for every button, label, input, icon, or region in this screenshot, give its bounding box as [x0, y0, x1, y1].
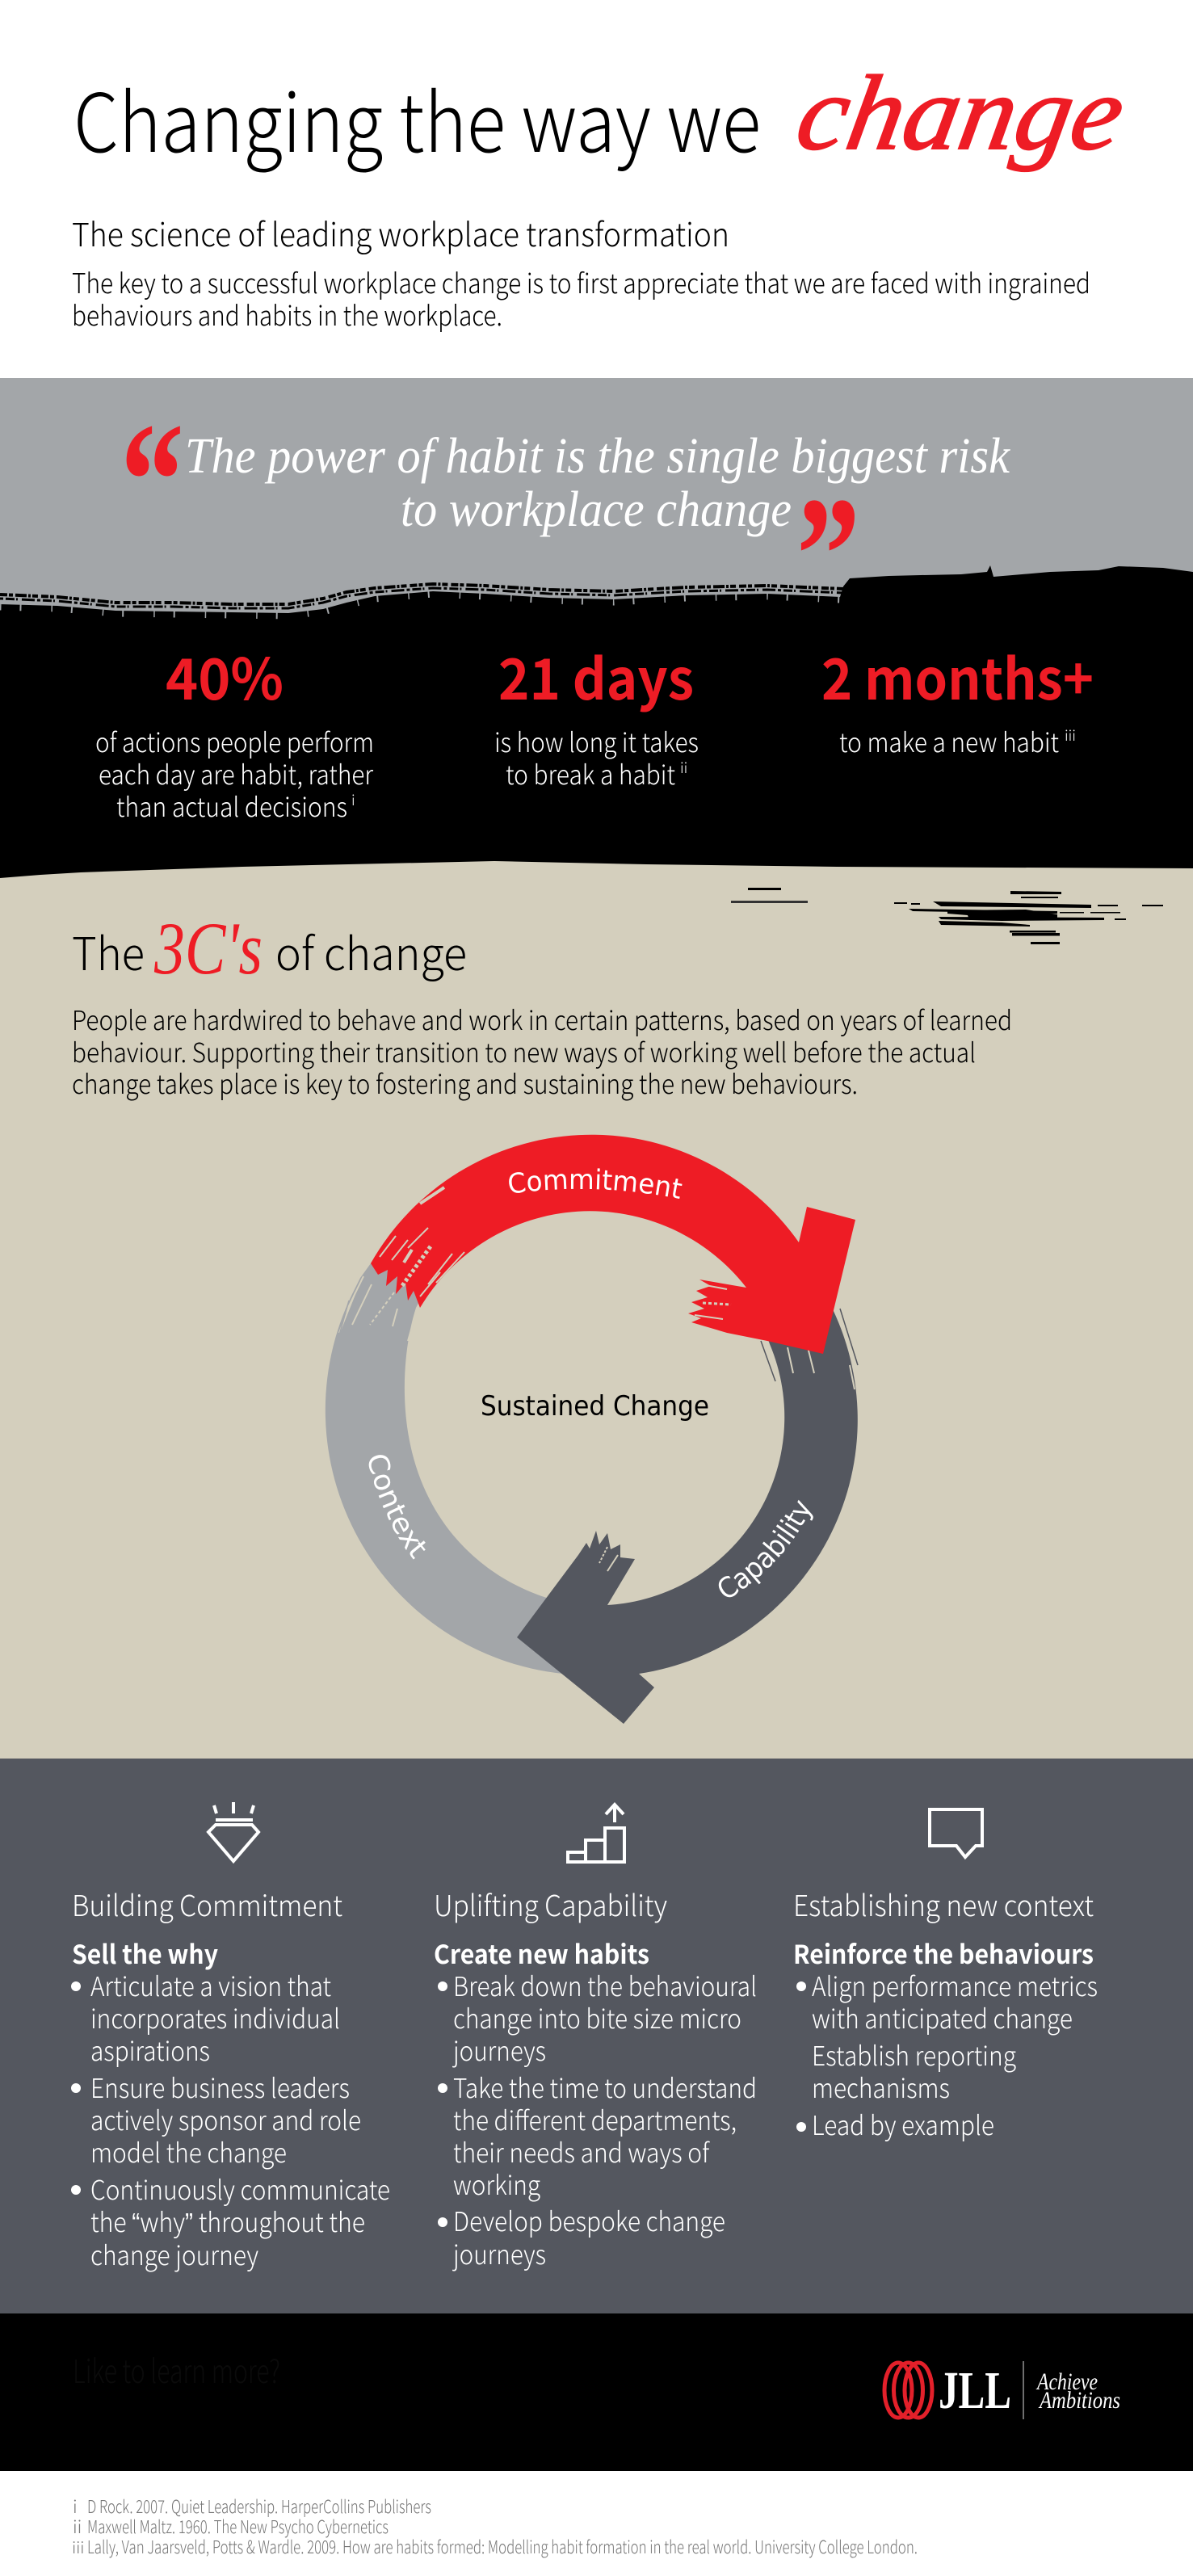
- statistic: 40%: than actual decisions: [116, 786, 347, 825]
- bullet list: Take the time to understand: [453, 2067, 757, 2106]
- statistic: 2 months+: iii: [1065, 725, 1076, 746]
- references: Maxwell Maltz. 1960. The New Psycho Cybernetics: [87, 2513, 389, 2539]
- column: building commitment: [71, 1802, 390, 2273]
- icon: diamond: [208, 1802, 258, 1861]
- faint call to action: Like to learn more?: [73, 2346, 280, 2393]
- panel: 3Cs background: [0, 861, 1193, 1759]
- bullet list: Align performance metrics: [812, 1965, 1098, 2004]
- icon: speech bubble: [930, 1809, 982, 1857]
- bullet list: actively sponsor and role: [90, 2099, 361, 2138]
- bullet list: journeys: [452, 2234, 546, 2272]
- bullet list: with anticipated change: [812, 1998, 1073, 2036]
- closing quote mark: ”: [796, 463, 860, 647]
- references: D Rock. 2007. Quiet Leadership. HarperCollins Publishers: [87, 2493, 431, 2519]
- logo: JLL: [884, 2361, 1120, 2420]
- subtitle: The science of leading workplace transformation: [72, 209, 729, 256]
- logo: JLL: Ambitions: [1038, 2387, 1120, 2414]
- bullet list: Develop bespoke change: [453, 2200, 725, 2239]
- panel: statistics band: [0, 565, 1193, 889]
- logo rings: [884, 2363, 932, 2418]
- heading: Building Commitment: [72, 1883, 342, 1925]
- subheading: Reinforce the behaviours: [793, 1935, 1094, 1972]
- statistic: 40%: i: [351, 789, 355, 810]
- 3Cs heading: of change: [275, 918, 467, 984]
- bullet list: aspirations: [90, 2030, 210, 2069]
- statistic: 40%: 40%: [166, 635, 284, 716]
- column: establishing new context: [793, 1809, 1098, 2143]
- references: ii: [73, 2513, 82, 2539]
- intro text: behaviours and habits in the workplace.: [72, 294, 502, 334]
- panel: actions: [0, 1759, 1193, 2313]
- 3Cs paragraph: behaviour. Supporting their transition to new ways of working well before the actual: [72, 1032, 976, 1070]
- 3Cs heading: [72, 907, 467, 990]
- bullet list: change into bite size micro: [453, 1998, 741, 2036]
- references: Lally, Van Jaarsveld, Potts & Wardle. 2009. How are habits formed: Modelling habit formation in the real world. University College London.: [87, 2533, 918, 2559]
- icon: rising bars: [568, 1805, 624, 1862]
- bullet list: change journey: [90, 2234, 258, 2273]
- bullet list: model the change: [90, 2132, 287, 2170]
- statistic: 2 months+: [821, 635, 1094, 760]
- label: Context: Context: [368, 1455, 426, 1559]
- logo: JLL: Achieve: [1035, 2368, 1098, 2395]
- bullet list: journeys: [452, 2030, 546, 2069]
- bullet list: [796, 1965, 1098, 2143]
- heading: Establishing new context: [793, 1883, 1094, 1925]
- references: [72, 2493, 918, 2559]
- statistic: 21 days: ii: [680, 757, 687, 778]
- cycle diagram: [325, 1134, 859, 1724]
- title: Changing the way we: [74, 58, 761, 175]
- statistic: 21 days: to break a habit: [506, 754, 675, 792]
- arrow: context: [325, 1263, 562, 1674]
- column: uplifting capability: [434, 1805, 757, 2272]
- bullet list: the different departments,: [453, 2099, 737, 2138]
- bullet list: Ensure business leaders: [90, 2067, 350, 2106]
- label: Commitment: Commitment: [509, 1168, 682, 1199]
- panel: footer band: [0, 2313, 1193, 2471]
- arrow: capability: [517, 1309, 859, 1724]
- references: i: [73, 2493, 78, 2519]
- statistic: 40%: each day are habit, rather: [99, 754, 373, 792]
- bullet list: their needs and ways of: [453, 2132, 710, 2170]
- bullet list: Establish reporting: [812, 2035, 1016, 2074]
- statistic: 40%: of actions people perform: [95, 721, 374, 760]
- statistic: 21 days: is how long it takes: [494, 721, 699, 760]
- statistic: 21 days: [494, 635, 699, 792]
- label: Capability: Capability: [719, 1499, 813, 1598]
- title script word: change: [789, 53, 1133, 172]
- bullet list: working: [453, 2164, 540, 2203]
- 3Cs paragraph: change takes place is key to fostering and sustaining the new behaviours.: [72, 1063, 858, 1102]
- arrow: commitment: [371, 1134, 855, 1354]
- script 3C's: 3C's: [153, 907, 263, 990]
- statistic: 2 months+: to make a new habit: [839, 721, 1059, 760]
- bullet list: [438, 1965, 757, 2272]
- quote text: The power of habit is the single biggest risk: [185, 429, 1010, 484]
- opening quote mark: “: [120, 389, 184, 573]
- references: iii: [72, 2535, 84, 2558]
- centre label: Sustained Change: [481, 1390, 709, 1422]
- header block: [72, 53, 1133, 334]
- panel: quote band: [0, 378, 1193, 647]
- 3Cs paragraph: People are hardwired to behave and work in certain patterns, based on years of learned: [72, 999, 1012, 1038]
- bullet list: incorporates individual: [90, 1998, 340, 2036]
- bullet list: Break down the behavioural: [453, 1965, 757, 2004]
- 3Cs heading: The: [72, 918, 145, 984]
- bullet list: the “why” throughout the: [90, 2201, 365, 2240]
- statistic: 40%: [95, 635, 374, 825]
- statistic: 2 months+: 2 months+: [821, 635, 1094, 716]
- bullet list: Articulate a vision that: [90, 1965, 331, 2004]
- subheading: Create new habits: [434, 1935, 649, 1972]
- heading: Uplifting Capability: [434, 1883, 667, 1925]
- bullet list: [71, 1965, 390, 2273]
- bullet list: mechanisms: [812, 2067, 950, 2106]
- quote text: to workplace change: [401, 482, 792, 537]
- bullet list: Continuously communicate: [90, 2169, 390, 2208]
- bullet list: Lead by example: [812, 2104, 994, 2143]
- statistic: 21 days: 21 days: [498, 635, 694, 716]
- subheading: Sell the why: [72, 1935, 218, 1972]
- logo: JLL: JLL: [939, 2361, 1011, 2420]
